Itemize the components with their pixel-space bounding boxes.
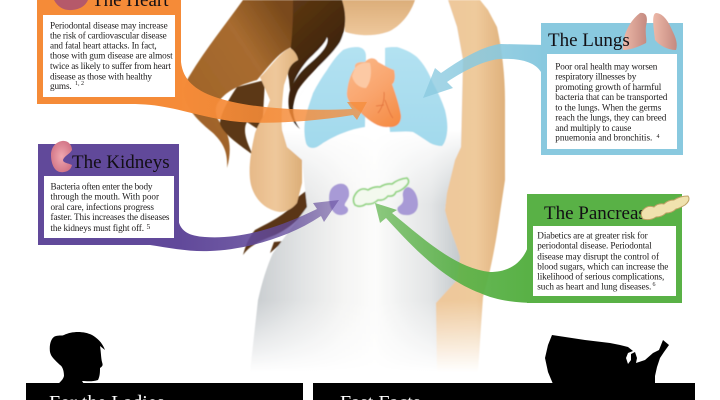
left lung	[304, 47, 366, 148]
body text: such as heart and lung diseases.	[537, 281, 651, 291]
arrow: lungs ribbon	[423, 44, 545, 100]
body text: respiratory illnesses by	[555, 71, 637, 81]
body text: to the lungs. When the germs	[555, 103, 662, 113]
body text: twice as likely to suffer from heart	[50, 61, 171, 71]
left arm and hand	[250, 48, 302, 212]
right arm	[432, 0, 505, 372]
body text: blood sugars, which can increase the	[537, 261, 668, 271]
body text: those with gum disease are almost	[50, 50, 173, 60]
icon: kidney	[51, 141, 72, 172]
kidney left organ	[329, 184, 349, 215]
body text: and multiply to cause	[555, 123, 631, 133]
fade of figure bottom	[235, 300, 495, 380]
hair	[184, 0, 345, 168]
panel background	[541, 23, 683, 155]
darker hair section	[287, 0, 345, 129]
panel: fast facts	[313, 383, 695, 400]
black bar	[313, 383, 695, 400]
heading: The Pancreas	[544, 203, 646, 224]
body text: gums.	[50, 81, 72, 91]
right lung	[385, 47, 447, 146]
body text: disease as those with healthy	[50, 72, 152, 82]
body text: through the mouth. With poor	[50, 191, 159, 201]
body text: likelihood of serious complications,	[537, 271, 664, 281]
body text: periodontal disease. Periodontal	[537, 240, 652, 250]
body text: bacteria that can be transported	[555, 92, 668, 102]
pancreas organ	[353, 178, 409, 206]
body text	[50, 181, 170, 233]
heading: The Kidneys	[72, 152, 170, 173]
hair tail behind waist	[243, 185, 314, 255]
dress	[250, 0, 463, 372]
body text: Diabetics are at greater risk for	[537, 230, 648, 240]
body text: 4	[656, 134, 660, 140]
icon: USA silhouette	[545, 335, 669, 384]
body text: pnuemonia and bronchitis.	[555, 133, 652, 143]
arrow: heart ribbon	[130, 50, 367, 123]
body text: faster. This increases the diseases	[50, 212, 170, 222]
heading: The Lungs	[548, 30, 630, 51]
neck and chin	[342, 0, 415, 35]
text card	[533, 226, 676, 296]
black bar	[26, 383, 303, 400]
body text: 6	[652, 282, 656, 288]
body text: Bacteria often enter the body	[50, 181, 153, 191]
white gap in hair	[293, 37, 328, 84]
panel: for the ladies	[26, 383, 303, 400]
body text: oral care, infections progress	[50, 202, 154, 212]
kidney right organ	[397, 187, 418, 215]
body text: Poor oral health may worsen	[555, 61, 658, 71]
body text: and fatal heart attacks. In fact,	[50, 40, 157, 50]
body text	[537, 230, 668, 291]
panel background	[38, 144, 179, 245]
panel background	[527, 194, 682, 303]
text card	[43, 15, 175, 97]
body text	[50, 20, 173, 91]
icon: woman head silhouette	[50, 332, 105, 384]
body text: the risk of cardiovascular disease	[50, 30, 167, 40]
body text: Periodontal disease may increase	[50, 20, 168, 30]
panel background	[37, 0, 181, 104]
lower curl	[220, 80, 265, 155]
body text: promoting growth of harmful	[555, 82, 662, 92]
panel: the heart	[37, 0, 181, 104]
figure: woman illustration	[184, 0, 505, 380]
icon: pancreas	[641, 196, 689, 220]
lighter hair section	[184, 0, 295, 168]
body text: reach the lungs, they can breed	[555, 113, 667, 123]
text card	[547, 54, 677, 149]
arrow: pancreas ribbon	[375, 203, 537, 303]
arrow: kidneys ribbon	[130, 200, 339, 251]
lungs organ	[304, 47, 447, 148]
body text: disease may disrupt the control of	[537, 251, 660, 261]
body text	[555, 61, 668, 143]
panel: the lungs	[541, 13, 683, 155]
body text: the kidneys must fight off.	[50, 223, 144, 233]
body text: 5	[146, 222, 150, 231]
heart organ	[347, 58, 401, 127]
icon: lungs	[623, 13, 677, 50]
text card	[44, 176, 174, 238]
panel: the kidneys	[38, 141, 179, 245]
icon: heart	[54, 0, 88, 10]
panel: the pancreas	[527, 194, 689, 303]
body text: 1, 2	[75, 81, 84, 87]
dress upper highlight	[282, 0, 463, 210]
